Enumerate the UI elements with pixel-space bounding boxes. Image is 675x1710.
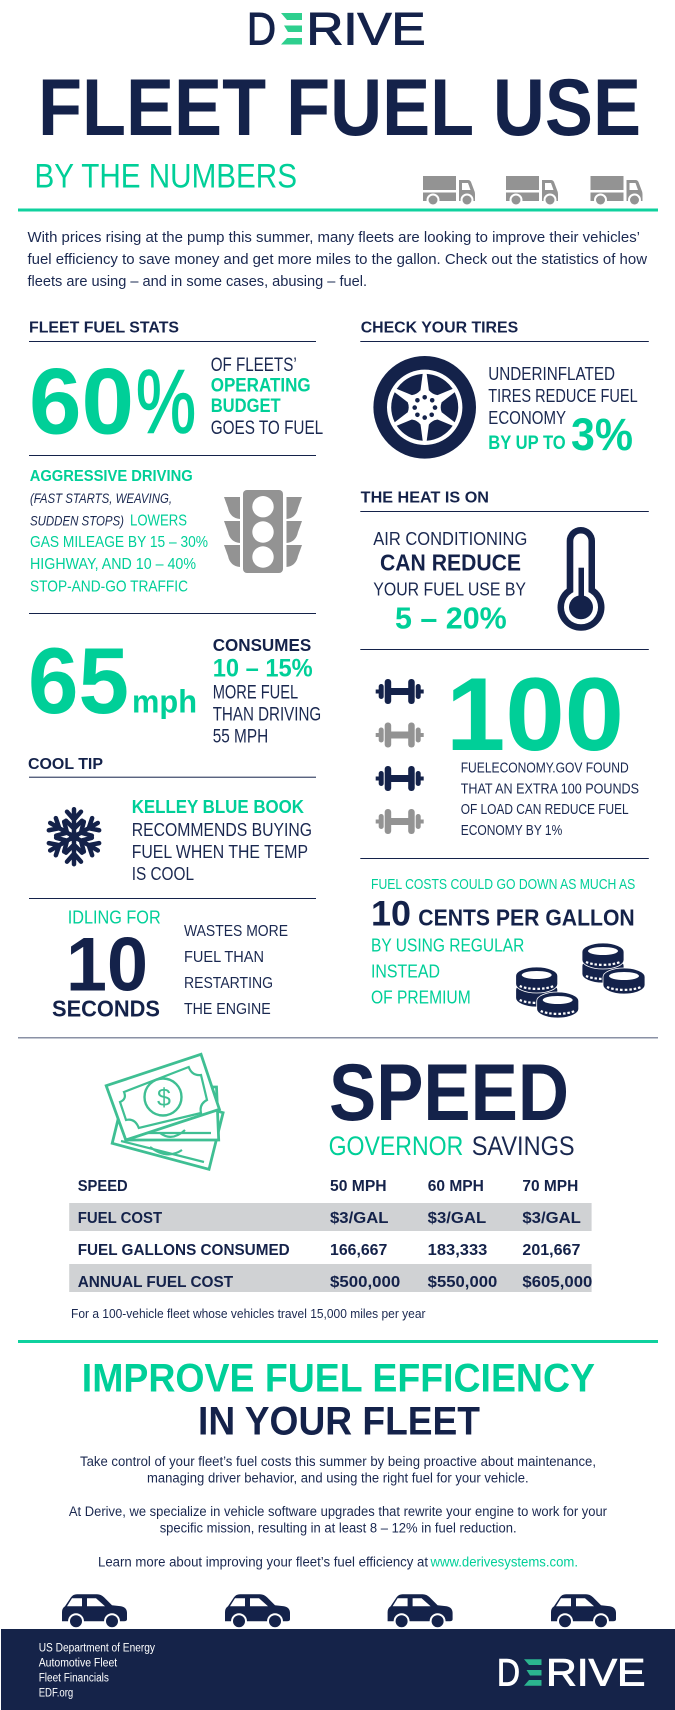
stat: idling for 10 seconds: SECONDS [52,996,160,1022]
subtitle: BY THE NUMBERS [34,158,297,196]
panel: the heat is on [360,490,649,650]
table: savings by speed: FUEL COST [78,1210,162,1227]
text: fueleconomy.gov: OF LOAD CAN REDUCE FUEL [461,802,629,818]
stat: 65 mph [28,628,197,733]
intro text [28,230,648,290]
stat: 60 percent: % [136,352,196,452]
text: operating budget [211,355,323,439]
icon: dumbbells [376,679,424,834]
panel: improve fuel efficiency [62,1357,616,1629]
panel: speed governor savings [69,1048,593,1321]
table: savings by speed: $3/GAL [522,1210,581,1227]
text: aggressive driving [30,468,208,596]
text: kelley blue book [132,797,312,884]
stat: idling for 10 seconds: IDLING FOR [68,906,161,927]
text: consumes more fuel: MORE FUEL [213,683,298,704]
text: aggressive driving: GAS MILEAGE BY 15 – 30% [30,534,208,551]
text: fuel costs: INSTEAD [371,961,440,982]
icon: thermometer [558,527,604,631]
text: sources: Fleet Financials [39,1673,109,1685]
text: call to action: managing driver behavior, and using the right fuel for your vehicle. [147,1471,529,1486]
icon: money bills: $ [157,1084,171,1112]
text: air conditioning: 5 – 20% [395,600,507,635]
intro text: fleets are using – and in some cases, abusing – fuel. [28,274,367,290]
panel: check your tires [360,320,649,460]
text: aggressive driving: STOP-AND-GO TRAFFIC [30,579,188,596]
text: fueleconomy.gov: FUELECONOMY.GOV FOUND [461,760,629,776]
text: kelley blue book: RECOMMENDS BUYING [132,819,312,840]
text: air conditioning: CAN REDUCE [380,550,521,576]
text: consumes more fuel: THAN DRIVING [213,705,321,726]
icons: four cars [62,1594,616,1629]
text: operating budget: OPERATING [211,376,311,397]
panel: cool tip [28,756,316,1022]
logo: Derive: RIVE [306,4,426,54]
heading: speed: SPEED [329,1048,569,1138]
text: consumes more fuel: 55 MPH [213,727,268,748]
heading: governor savings: GOVERNOR [329,1131,463,1161]
table: savings by speed: 166,667 [330,1242,387,1259]
text: call to action: Learn more about improving your fleet’s fuel efficiency at [98,1554,428,1569]
heading: governor savings: SAVINGS [472,1131,575,1161]
table: savings by speed: 201,667 [522,1242,580,1259]
icon: coin stacks [516,943,645,1018]
text: call to action: www.derivesystems.com. [430,1554,578,1569]
stat: 60 percent: 60 [29,348,134,454]
heading: improve fuel efficiency [82,1357,595,1444]
icon: tire [373,356,476,459]
icon: money bills [106,1054,223,1169]
text: operating budget: BUDGET [211,396,281,417]
text: wastes more fuel [184,923,288,1018]
heading: governor savings [329,1131,575,1161]
table: savings by speed: SPEED [78,1178,128,1195]
table: savings by speed: FUEL GALLONS CONSUMED [78,1242,290,1259]
text: underinflated tires: TIRES REDUCE FUEL [488,385,638,406]
text: underinflated tires: BY UP TO [488,433,566,454]
table: savings by speed: 70 MPH [522,1178,578,1195]
panel: regular instead of premium [371,877,645,1018]
text: fueleconomy.gov: ECONOMY BY 1% [461,823,562,839]
logo: Derive white [497,1653,646,1695]
table: savings by speed [69,1178,593,1292]
text: fueleconomy.gov: THAT AN EXTRA 100 POUNDS [461,781,639,797]
table: savings by speed: 60 MPH [428,1178,484,1195]
text: consumes more fuel: 10 – 15% [213,655,313,683]
heading: improve fuel efficiency: IN YOUR FLEET [198,1400,480,1444]
heading: cool tip: COOL TIP [28,756,103,773]
text: call to action: At Derive, we specialize in vehicle software upgrades that rewrite your engine to work for your [69,1504,607,1519]
stat: idling for 10 seconds: 10 [66,923,148,1008]
text: kelley blue book: FUEL WHEN THE TEMP [132,841,308,862]
heading: check your tires: CHECK YOUR TIRES [361,320,519,337]
text: aggressive driving: AGGRESSIVE DRIVING [30,468,193,485]
intro text: fuel efficiency to save money and get more miles to the gallon. Check out the statistics of how [28,252,648,268]
table: savings by speed: $3/GAL [330,1210,389,1227]
text: call to action: specific mission, resulting in at least 8 – 12% in fuel reduction. [160,1521,517,1536]
stat: 65 mph: 65 [28,628,129,733]
heading: fleet fuel stats: FLEET FUEL STATS [29,320,179,337]
text: wastes more fuel: FUEL THAN [184,949,264,966]
stat: idling for 10 seconds [52,906,161,1022]
text: fuel costs: OF PREMIUM [371,986,471,1007]
text: underinflated tires: UNDERINFLATED [488,363,615,384]
text: underinflated tires [488,363,638,460]
heading: improve fuel efficiency: IMPROVE FUEL EFFICIENCY [82,1357,595,1401]
icons: three trucks [423,176,642,206]
footer [1,1629,675,1710]
text: kelley blue book: IS COOL [132,863,194,884]
text: air conditioning: YOUR FUEL USE BY [373,579,526,600]
logo: Derive: D [247,4,276,54]
stat: 65 mph: mph [132,684,197,720]
text: operating budget: GOES TO FUEL [211,418,323,439]
table: savings by speed: ANNUAL FUEL COST [78,1274,233,1291]
icon: snowflake [46,809,102,864]
text: wastes more fuel: WASTES MORE [184,923,288,940]
logo: Derive [247,4,426,54]
stat: 60 percent [29,348,196,454]
table: savings by speed: $500,000 [330,1274,400,1291]
text: fuel costs: 10 [371,895,411,934]
logo: Derive white: D [497,1653,520,1695]
text: sources: US Department of Energy [39,1643,155,1655]
table: savings by speed: 50 MPH [330,1178,387,1195]
text: aggressive driving: LOWERS [130,513,187,530]
text: fuel costs: CENTS PER GALLON [418,905,635,931]
text: fuel costs [371,877,635,1007]
table: savings by speed: 183,333 [428,1242,487,1259]
text: kelley blue book: KELLEY BLUE BOOK [132,797,304,817]
text: air conditioning: AIR CONDITIONING [373,528,527,549]
text: wastes more fuel: RESTARTING [184,975,273,992]
text: operating budget: OF FLEETS’ [211,355,297,376]
text: consumes more fuel [213,635,321,748]
text: wastes more fuel: THE ENGINE [184,1001,271,1018]
text: call to action [69,1454,607,1569]
text: aggressive driving: HIGHWAY, AND 10 – 40% [30,556,196,573]
panel: fleet fuel stats [28,320,323,748]
footnote: For a 100-vehicle fleet whose vehicles travel 15,000 miles per year [71,1307,426,1321]
text: aggressive driving: (FAST STARTS, WEAVING, [30,490,172,506]
stat: 100: 100 [446,657,624,773]
intro text: With prices rising at the pump this summer, many fleets are looking to improve their vehicles’ [28,230,640,246]
text: sources: EDF.org [39,1688,73,1700]
text: fueleconomy.gov [461,760,639,839]
text: underinflated tires: ECONOMY [488,407,566,428]
text: call to action: Take control of your fleet’s fuel costs this summer by being proactive about maintenance, [80,1454,596,1469]
text: air conditioning [373,528,527,635]
text: sources: Automotive Fleet [39,1658,118,1670]
text: aggressive driving: SUDDEN STOPS) [30,513,124,529]
panel: 100 pounds of load [360,657,649,859]
logo: Derive white: RIVE [546,1653,646,1695]
table: savings by speed: $3/GAL [428,1210,486,1227]
text: underinflated tires: 3% [571,409,633,460]
text: fuel costs: BY USING REGULAR [371,935,524,956]
text: sources [39,1643,155,1700]
icon: traffic light [224,490,302,573]
heading: the heat is on: THE HEAT IS ON [361,490,489,507]
table: savings by speed: $605,000 [522,1274,593,1291]
table: savings by speed: $550,000 [428,1274,497,1291]
text: consumes more fuel: CONSUMES [213,635,311,655]
